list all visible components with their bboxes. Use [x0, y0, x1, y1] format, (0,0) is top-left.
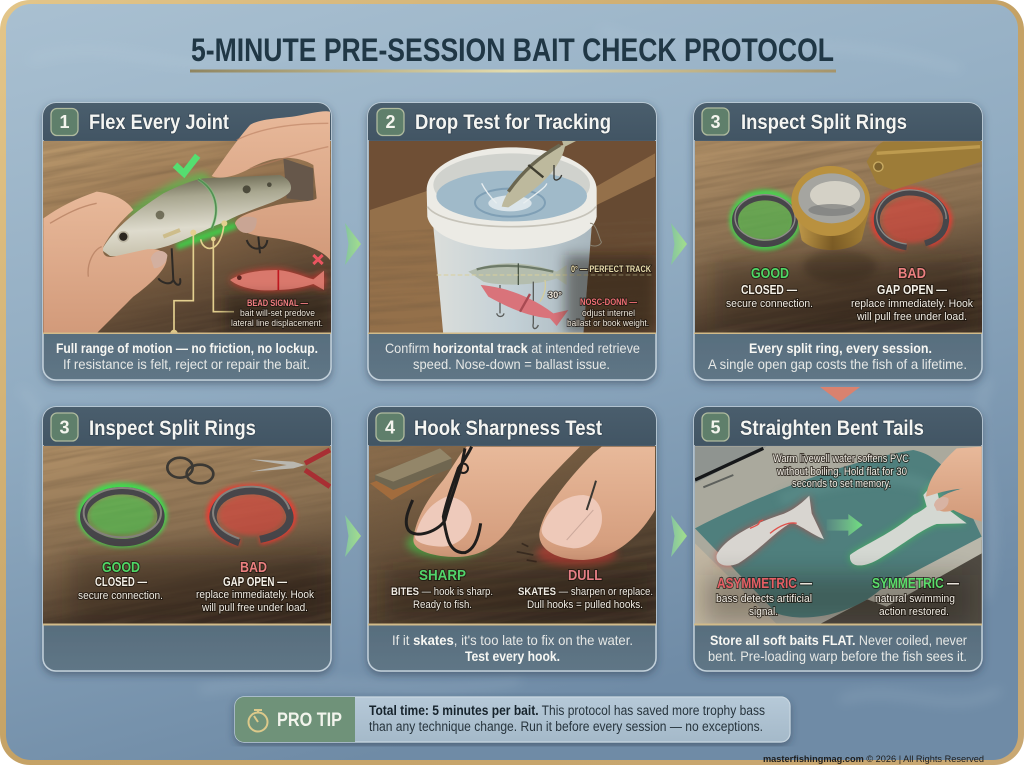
left nail [415, 497, 472, 547]
hand [926, 447, 982, 522]
card 5 caption: bent. Pre-loading warp before the fish sees it. [708, 648, 967, 664]
card 2 caption: Confirm horizontal track at intended retrieve [385, 340, 640, 356]
livewell note: without boiling. Hold flat for 30 [776, 466, 907, 478]
card 4 heading [376, 413, 602, 441]
track angle labels: ballast or book weight. [567, 318, 649, 329]
card 4 heading: 4 [385, 418, 395, 438]
good label: CLOSED — [95, 575, 147, 589]
good label [726, 265, 813, 310]
pro tip bar [235, 697, 790, 742]
dull label [518, 567, 653, 611]
bad ring [882, 197, 942, 243]
pro tip text [369, 703, 765, 734]
sharp label [391, 567, 493, 611]
livewell note: seconds to set memory. [792, 478, 891, 490]
bad label: BAD [898, 265, 926, 282]
straight shad [850, 482, 967, 565]
bucket body [433, 227, 592, 335]
card 2 caption [385, 340, 640, 372]
pink nose-down fish [481, 285, 568, 326]
loupe barrel [795, 207, 870, 250]
card 3 heading: Inspect Split Rings [741, 111, 907, 134]
sharp label: SHARP [419, 567, 466, 584]
treble hook [406, 447, 481, 553]
arrow: step 4 to 5 [671, 515, 687, 557]
card 1 heading: Flex Every Joint [89, 111, 229, 134]
red fish bad example [230, 270, 324, 290]
panel: inspect split rings with pliers [37, 404, 336, 679]
symmetric label: action restored. [879, 606, 949, 618]
water [436, 171, 587, 221]
image: hands flexing a jointed swimbait [43, 111, 331, 332]
loupe shadow [803, 250, 877, 283]
panel: step 5 straighten bent tails [694, 407, 982, 671]
card 1 bad signal note [231, 298, 323, 329]
track angle labels: 30° [548, 290, 562, 301]
skate marks [517, 543, 537, 562]
whetstone [370, 474, 436, 500]
good label: secure connection. [726, 298, 813, 310]
bad label [196, 559, 314, 614]
good label: CLOSED — [741, 283, 797, 297]
asymmetric label: signal. [749, 606, 778, 618]
panel: step 1 flex every joint [37, 100, 337, 389]
bad label: replace immediately. Hook [196, 589, 314, 601]
bad label: GAP OPEN — [223, 575, 287, 589]
pro tip text: than any technique change. Run it before every session — no exceptions. [369, 719, 763, 734]
right thumb [539, 447, 655, 560]
small rings [167, 458, 193, 478]
image: rings and loupe [695, 141, 982, 332]
track angle labels: NOSC-DONN — [580, 297, 637, 308]
dull label: SKATES — sharpen or replace. [518, 586, 653, 598]
card 4 caption: Test every hook. [465, 648, 560, 664]
card 5 heading: Straighten Bent Tails [740, 417, 924, 440]
card 5 caption [708, 632, 967, 664]
image: good and bad rings [43, 446, 331, 624]
image rule [43, 624, 331, 626]
arrow: step 1 to 2 [345, 223, 361, 265]
dull hook [587, 481, 596, 510]
card 4 caption [392, 632, 633, 664]
right nail [542, 495, 602, 548]
good ring [738, 200, 792, 241]
footer credit: masterfishingmag.com © 2026 | All Rights Reserved [763, 754, 984, 765]
arrow between baits [827, 514, 863, 536]
tail [283, 158, 313, 202]
panel: step 2 drop test [347, 103, 683, 380]
asymmetric label [716, 575, 812, 618]
dull label: Dull hooks = pulled hooks. [527, 599, 643, 611]
card 5 heading [702, 413, 924, 441]
panel: step 4 hook sharpness test [362, 404, 661, 679]
card 3 caption [708, 340, 967, 372]
image rule [368, 624, 656, 626]
card 3 image rule [694, 332, 982, 334]
bent shad [717, 496, 824, 566]
pro tip text: Total time: 5 minutes per bait. This protocol has saved more trophy bass [369, 703, 765, 718]
good label: secure connection. [78, 590, 163, 602]
dropped fish [502, 141, 576, 208]
left thumb [413, 447, 580, 557]
horizontal fish [468, 263, 567, 285]
water [695, 450, 982, 617]
card 1 bad signal note: lateral line displacement. [231, 318, 323, 329]
livewell note [773, 453, 909, 490]
image rule [694, 624, 982, 626]
pliers [250, 459, 305, 472]
symmetric label: SYMMETRIC — [872, 575, 959, 592]
card 2 image rule [368, 332, 656, 334]
image: bucket drop test [369, 141, 656, 332]
arrow: step 2 to 3 [671, 223, 687, 265]
card 4 caption: If it skates, it's too late to fix on the water. [392, 632, 633, 648]
red x [313, 255, 323, 264]
symmetric label: natural swimming [875, 593, 955, 605]
symmetric label [872, 575, 959, 618]
card 5 heading: 5 [710, 418, 721, 438]
card heading: Inspect Split Rings [89, 417, 256, 440]
track angle labels: odjust internel [582, 308, 635, 319]
card 1 heading [51, 108, 229, 136]
hooks [158, 237, 267, 285]
asymmetric label: bass detects artificial [716, 593, 812, 605]
bad label: GAP OPEN — [877, 283, 947, 297]
bad label [851, 265, 973, 323]
arrow: down to step 5 [820, 387, 860, 402]
bad label: will pull free under load. [856, 311, 967, 323]
sharp label: Ready to fish. [413, 599, 472, 611]
bad label: replace immediately. Hook [851, 298, 973, 310]
card 2 caption: speed. Nose-down = ballast issue. [413, 356, 610, 372]
bad label: will pull free under load. [201, 602, 308, 614]
good label: GOOD [102, 559, 140, 576]
card 3 heading [702, 108, 907, 135]
card heading [51, 413, 256, 441]
title underline [190, 70, 836, 72]
card 3 heading: 3 [710, 112, 721, 132]
card 4 heading: Hook Sharpness Test [414, 417, 602, 440]
card 5 caption: Store all soft baits FLAT. Never coiled, never [710, 632, 967, 648]
dashed level line [436, 274, 652, 276]
card 1 image rule [43, 332, 331, 334]
dull label: DULL [568, 567, 602, 584]
green check mark [175, 156, 198, 173]
asymmetric label: ASYMMETRIC — [717, 575, 812, 592]
card 2 heading [377, 108, 611, 136]
title: 5-MINUTE PRE-SESSION BAIT CHECK PROTOCOL [191, 32, 834, 68]
icon: stopwatch [248, 710, 268, 732]
loupe arm [867, 142, 982, 190]
right hand [212, 111, 330, 260]
card 1 heading: 1 [59, 112, 70, 132]
card 1 caption: If resistance is felt, reject or repair the bait. [63, 356, 310, 372]
good label [78, 559, 163, 602]
livewell note: Warm livewell water softens PVC [773, 453, 909, 465]
pro tip label: PRO TIP [277, 710, 342, 731]
card 2 heading: Drop Test for Tracking [415, 111, 611, 134]
card 3 caption: A single open gap costs the fish of a lifetime. [708, 356, 967, 372]
arrow: to step 4 [345, 515, 361, 557]
good label: GOOD [751, 265, 789, 282]
card heading: 3 [59, 418, 70, 438]
glows [407, 528, 487, 558]
left hand [43, 192, 167, 333]
bad label: BAD [240, 559, 267, 576]
callout leader lines [174, 223, 234, 333]
card 3 caption: Every split ring, every session. [749, 340, 932, 356]
panel: step 3 inspect split rings with loupe [688, 100, 988, 388]
card 1 bad signal note: BEAD SIGNAL — [247, 298, 308, 309]
bucket rim [427, 147, 597, 249]
sharp label: BITES — hook is sharp. [391, 586, 493, 598]
card 1 caption [56, 340, 318, 372]
track angle labels: 0° — PERFECT TRACK [571, 264, 651, 275]
image: thumbs and hooks [369, 446, 656, 624]
card 1 caption: Full range of motion — no friction, no lockup. [56, 340, 318, 356]
image: livewell with soft baits [695, 446, 982, 624]
track angle labels [548, 264, 651, 329]
card 1 bad signal note: bait will-set predove [240, 308, 315, 319]
card 2 heading: 2 [385, 112, 396, 132]
